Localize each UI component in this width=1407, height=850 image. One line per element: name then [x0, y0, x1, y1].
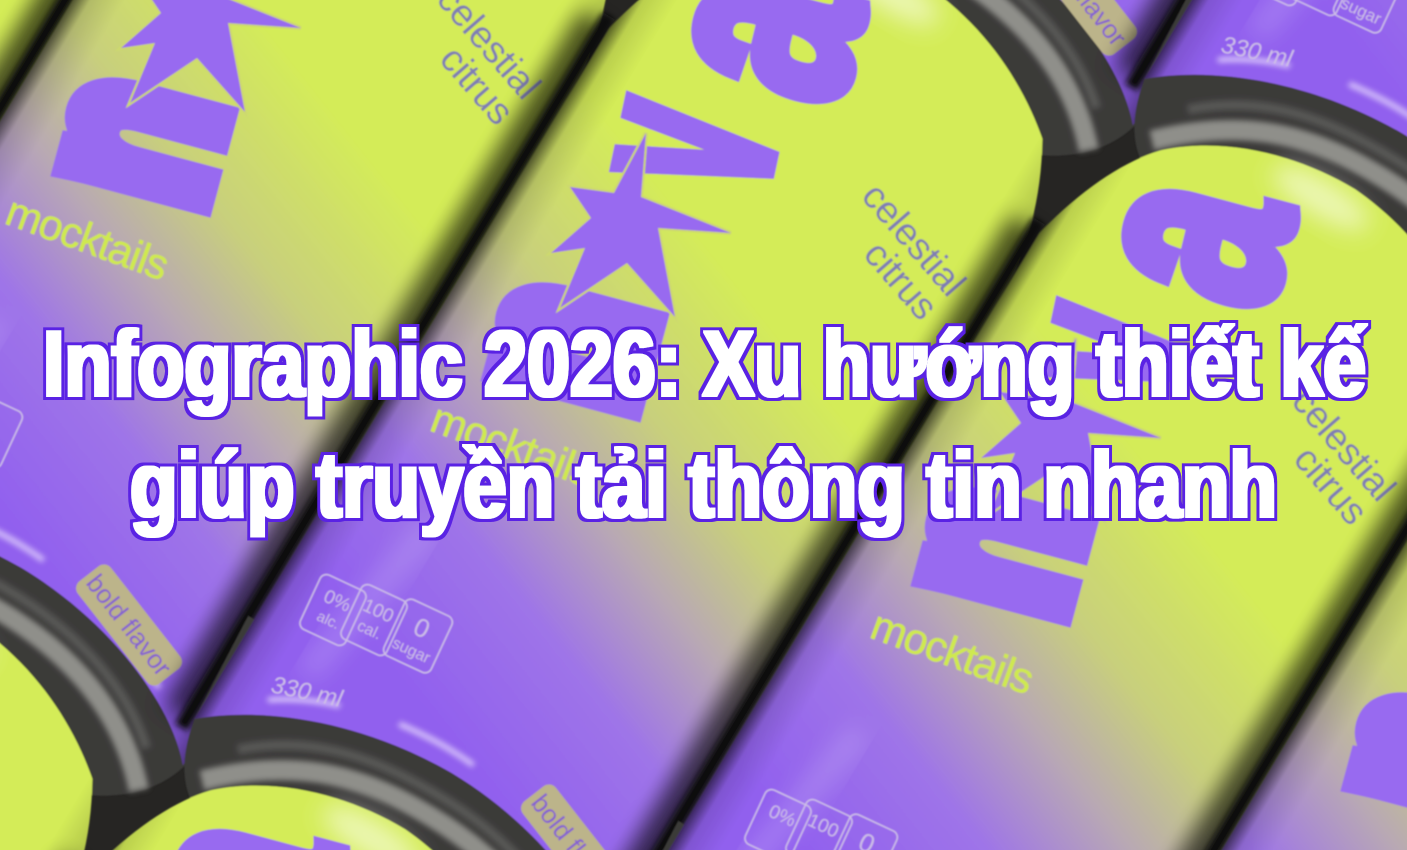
- can: top right, purple base with nutrition boxes: [1089, 0, 1407, 403]
- title: [43, 311, 1367, 537]
- nutrition boxes: [1248, 0, 1405, 35]
- product text: [425, 175, 973, 497]
- logo: a: [1017, 143, 1354, 333]
- logo: n: [404, 250, 706, 433]
- nutrition box: [0, 392, 25, 470]
- product text: [865, 380, 1403, 704]
- nutrition boxes: [298, 572, 455, 675]
- product text: celestial: [1283, 380, 1403, 509]
- nutrition boxes: sugar: [389, 635, 433, 667]
- label: 330 ml: 330 ml: [269, 671, 345, 713]
- logo: n: [834, 455, 1136, 638]
- can: left column: [0, 0, 705, 838]
- product text: mocktails: [425, 394, 599, 497]
- product text: citrus: [855, 233, 945, 328]
- nutrition boxes: cal.: [354, 617, 384, 643]
- label: 330 ml: 330 ml: [1219, 31, 1295, 73]
- nutrition boxes: 100: [359, 595, 397, 628]
- nutrition boxes: [743, 787, 900, 850]
- can: right column: [569, 54, 1407, 850]
- tag: bold flavor: bold flavor: [80, 568, 178, 682]
- can: centre: [139, 0, 1135, 850]
- product text: mocktails: [865, 601, 1039, 704]
- logo: v: [950, 282, 1262, 415]
- can: bottom left: [0, 489, 185, 850]
- product text: citrus: [431, 38, 521, 133]
- nutrition boxes: 100: [804, 810, 842, 843]
- product text: citrus: [1285, 438, 1375, 533]
- product text: mocktails: [0, 187, 174, 290]
- logo: v: [520, 77, 832, 210]
- nutrition boxes: 0%: [320, 586, 354, 617]
- product text: [0, 0, 548, 290]
- nutrition boxes: 0%: [765, 801, 799, 832]
- logo: [404, 0, 924, 433]
- can: top centre, purple base with bold flavor tag: [659, 0, 1407, 198]
- nutrition boxes: alc.: [314, 608, 342, 633]
- logo: [834, 143, 1354, 638]
- can: far top left: [0, 0, 275, 633]
- nutrition boxes: 0: [409, 611, 435, 644]
- product text: celestial: [853, 175, 973, 304]
